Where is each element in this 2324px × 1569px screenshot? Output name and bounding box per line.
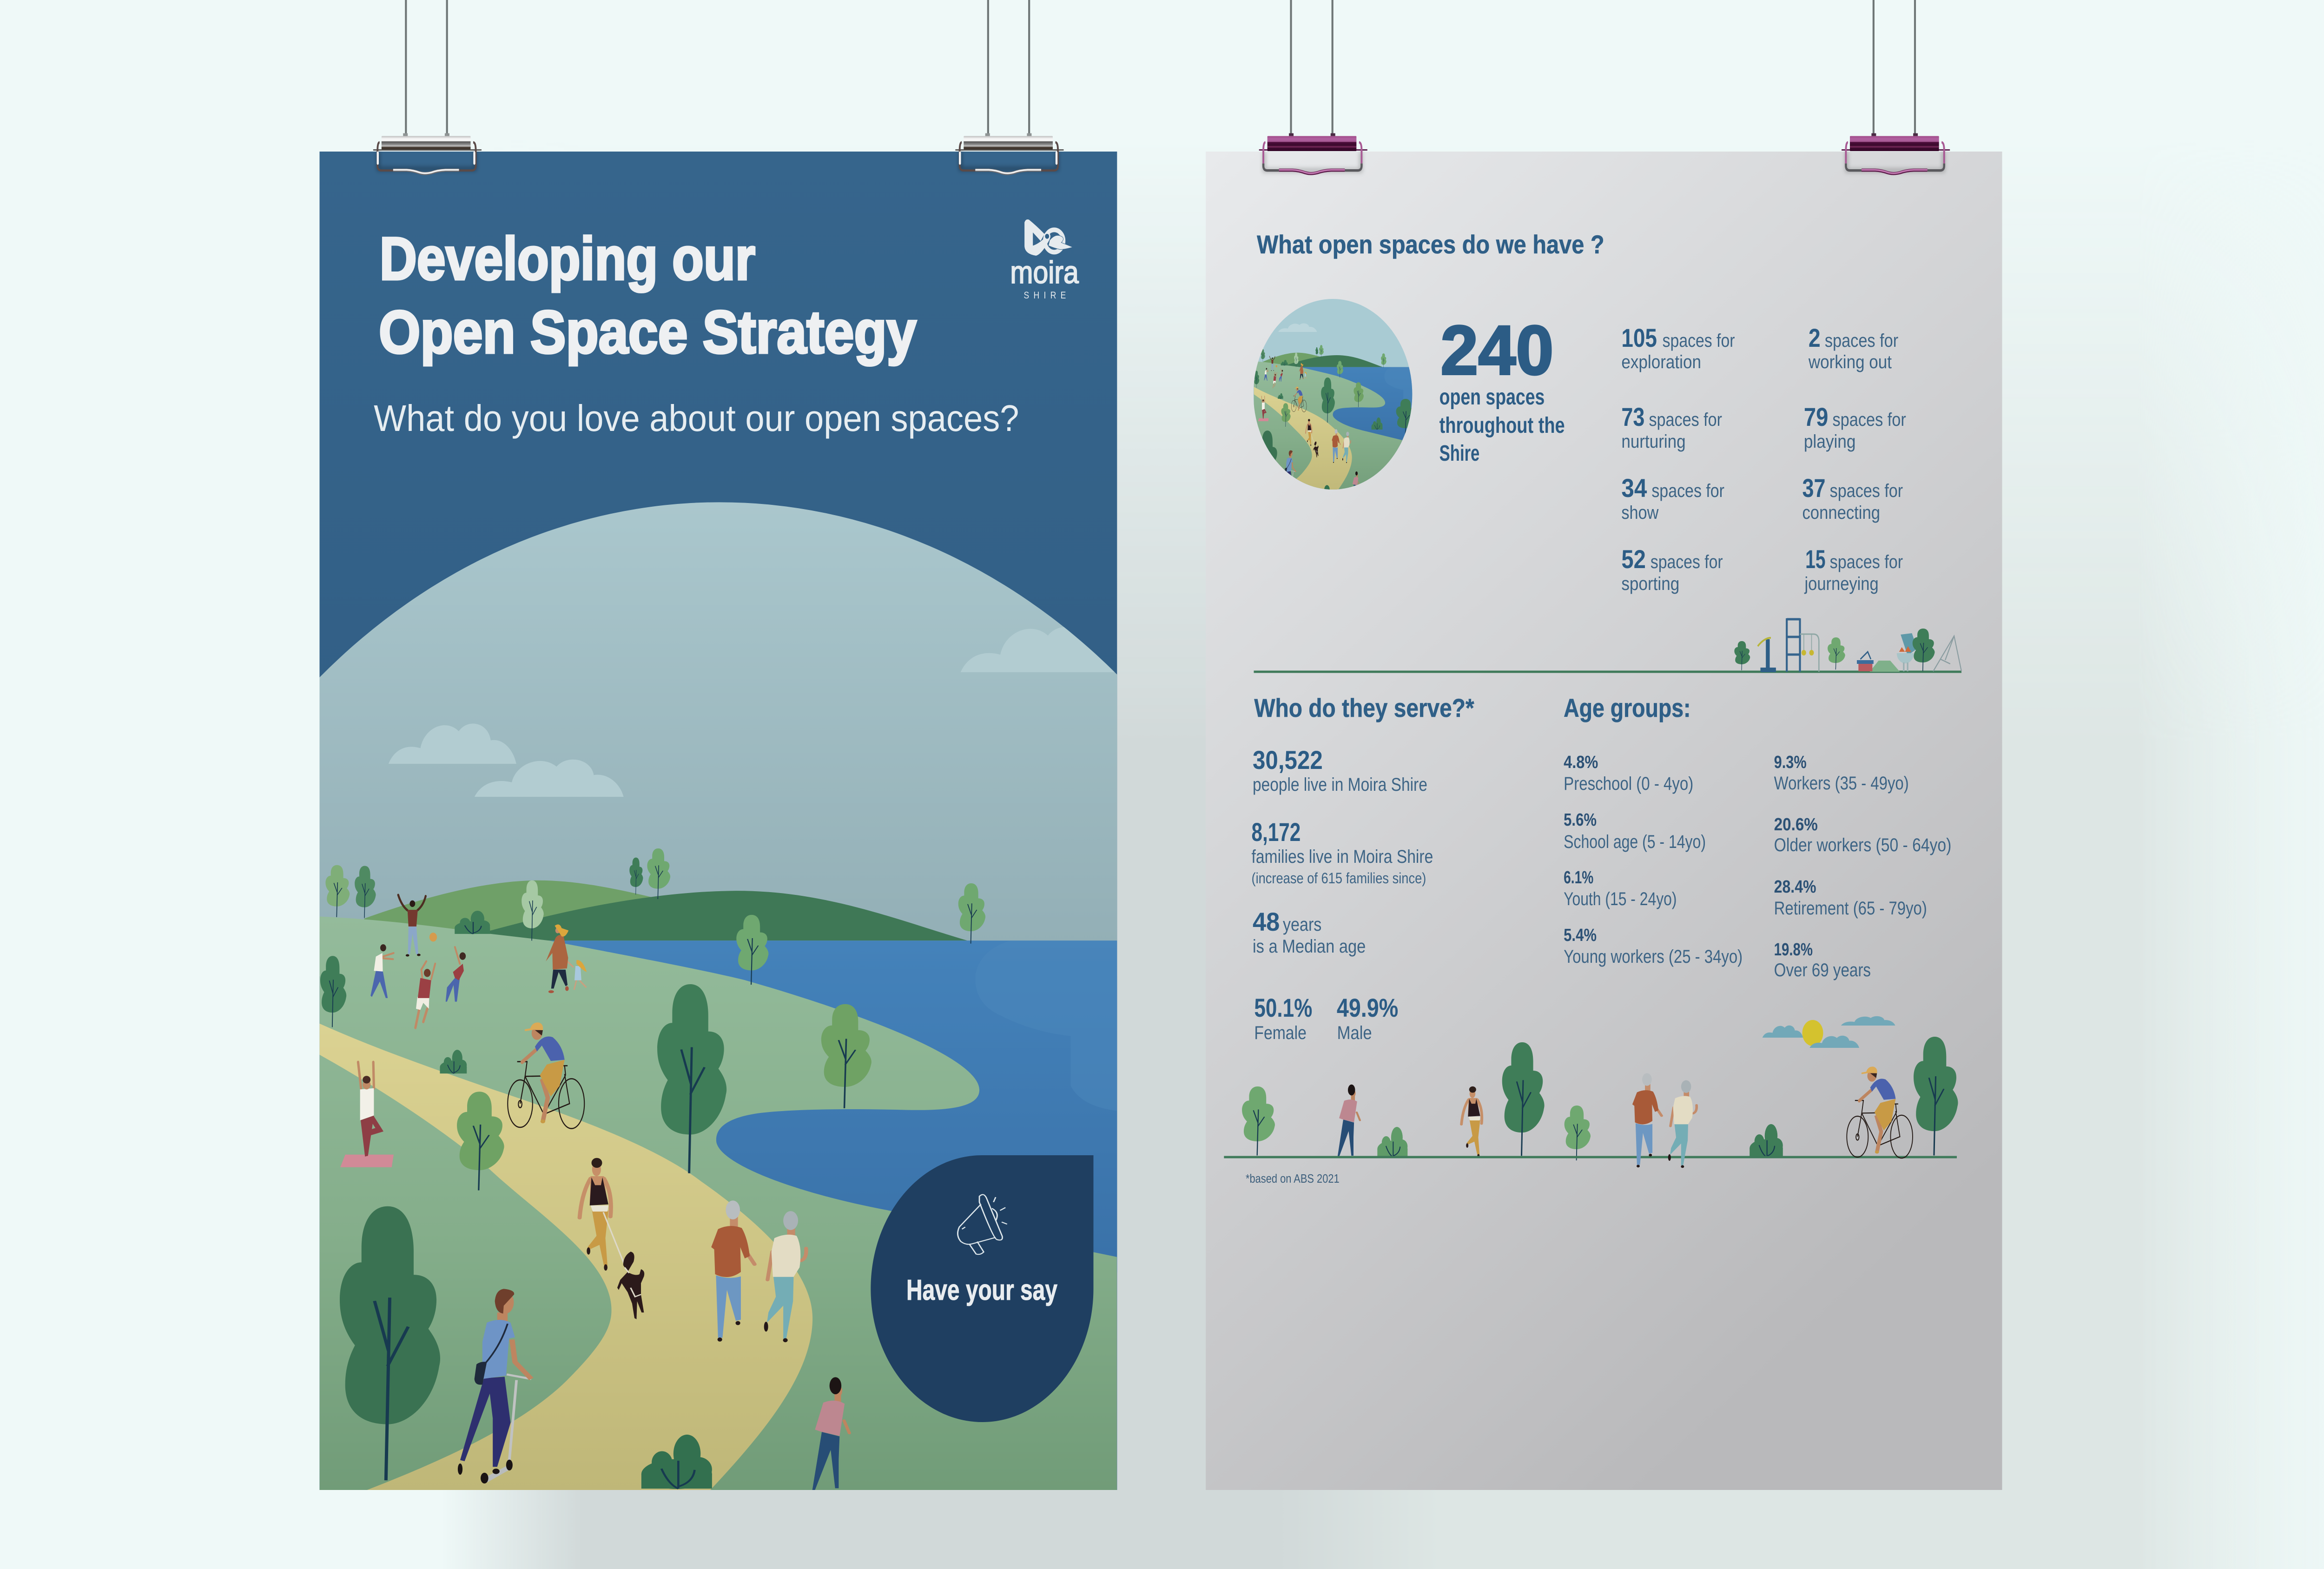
- age: workers: 9.3%: [1774, 752, 1807, 772]
- stat: working out: spaces for: [1825, 330, 1898, 351]
- stat: show: [1621, 473, 1724, 523]
- age: preschool: [1564, 752, 1693, 794]
- ground: [320, 916, 1117, 1491]
- player in maroon: [446, 947, 466, 1002]
- clips: plum: [1259, 133, 1950, 173]
- background wall: [477, 305, 2233, 1569]
- player in red with white shorts: [416, 961, 435, 1028]
- stat: sporting: 52: [1621, 544, 1646, 574]
- illustration: people strip: [1224, 1016, 1958, 1168]
- stat: 240 open spaces: throughout the: [1439, 413, 1565, 438]
- figures: group at play: [340, 895, 587, 1167]
- stat: playing: [1804, 402, 1906, 452]
- stat: show: 34: [1621, 473, 1647, 503]
- stat: exploration: exploration: [1621, 351, 1701, 372]
- fact: female: 50.1%: [1254, 993, 1312, 1022]
- lake: [473, 940, 1125, 1273]
- population facts: [1251, 745, 1433, 1043]
- fact: families: families live in Moira Shire: [1251, 846, 1433, 867]
- logo: moira shire: moira: [1010, 255, 1079, 290]
- callout label: Have your say: [906, 1274, 1057, 1306]
- stat: connecting: [1802, 473, 1903, 523]
- clips: metal: [373, 133, 1064, 173]
- stat: 240 open spaces: [1439, 311, 1565, 466]
- age: retirement: [1774, 877, 1927, 919]
- stat: nurturing: nurturing: [1621, 431, 1686, 452]
- stats: spaces by type: [1621, 323, 1906, 594]
- fact: male: 49.9%: [1337, 993, 1398, 1022]
- player in white: [370, 944, 394, 998]
- age: older workers: Older workers (50 - 64yo): [1774, 834, 1951, 855]
- poster background: [320, 152, 1117, 1490]
- stat: working out: 2: [1809, 323, 1821, 352]
- person walking: [812, 1377, 849, 1490]
- age: youth: Youth (15 - 24yo): [1564, 888, 1677, 909]
- title: [379, 225, 917, 366]
- stat: playing: spaces for: [1833, 409, 1906, 430]
- stat: 240 open spaces: open spaces: [1439, 385, 1545, 410]
- icon: megaphone: [957, 1195, 1007, 1254]
- age: workers: [1774, 752, 1909, 794]
- age: young workers: [1564, 925, 1743, 967]
- yoga woman: [340, 1062, 394, 1167]
- hanging wires: [406, 0, 1915, 135]
- footnote: *based on ABS 2021: [1246, 1172, 1340, 1186]
- stat: 240 open spaces: 240: [1440, 311, 1554, 390]
- trees: [320, 848, 985, 1480]
- clouds: [389, 627, 1119, 797]
- hills: [364, 880, 967, 940]
- walking path: [320, 1024, 812, 1491]
- park landscape illustration: [320, 848, 1125, 1491]
- age: retirement: Retirement (65 - 79yo): [1774, 898, 1927, 919]
- elderly couple: [711, 1200, 806, 1342]
- stat: nurturing: [1621, 402, 1722, 452]
- stat: journeying: journeying: [1804, 573, 1879, 594]
- stat: sporting: [1621, 544, 1723, 594]
- fact: median age: is a Median age: [1253, 936, 1366, 957]
- age: retirement: 28.4%: [1774, 877, 1816, 897]
- stat: working out: working out: [1808, 351, 1892, 372]
- fact: families: [1251, 817, 1433, 887]
- age: over 69: Over 69 years: [1774, 960, 1871, 980]
- stat: show: show: [1621, 502, 1659, 523]
- cyclist: [508, 1022, 584, 1129]
- callout: have your say: [871, 1155, 1093, 1422]
- fact: median age: years: [1283, 914, 1321, 935]
- stat: playing: playing: [1804, 431, 1855, 452]
- age: preschool: 4.8%: [1564, 752, 1598, 772]
- age: workers: Workers (35 - 49yo): [1774, 773, 1909, 794]
- logo: moira shire: SHIRE: [1023, 291, 1066, 301]
- stat: journeying: [1804, 544, 1903, 594]
- illustration: round park scene: [1254, 298, 1416, 499]
- fact: population: [1253, 745, 1427, 795]
- stat: connecting: connecting: [1802, 502, 1880, 523]
- figures: path walkers: [458, 1158, 849, 1490]
- stat: exploration: [1621, 323, 1735, 372]
- heading: age groups: Age groups:: [1564, 693, 1691, 722]
- title: Open Space Strategy: [379, 299, 917, 366]
- fact: population: 30,522: [1253, 745, 1323, 775]
- fact: female: Female: [1254, 1022, 1307, 1043]
- age: older workers: [1774, 814, 1951, 855]
- panel: facts poster: [1206, 152, 2002, 1490]
- fact: families: 8,172: [1251, 817, 1301, 847]
- age: preschool: Preschool (0 - 4yo): [1564, 773, 1693, 794]
- fact: families: (increase of 615 families since): [1251, 870, 1426, 887]
- dog on leash: [603, 1212, 644, 1319]
- panel: strategy poster: [320, 152, 1125, 1491]
- stat: connecting: 37: [1802, 473, 1826, 503]
- fact: male: Male: [1337, 1022, 1372, 1043]
- fact: median age: 48: [1253, 907, 1280, 936]
- age groups list: [1564, 752, 1951, 980]
- fact: population: people live in Moira Shire: [1253, 774, 1427, 795]
- stat: connecting: spaces for: [1830, 480, 1903, 501]
- age: school: School age (5 - 14yo): [1564, 831, 1706, 852]
- ball: [429, 933, 437, 942]
- age: young workers: Young workers (25 - 34yo): [1564, 946, 1743, 967]
- parent and child: [546, 924, 587, 993]
- stat: journeying: 15: [1805, 544, 1826, 574]
- stat: exploration: spaces for: [1663, 330, 1735, 351]
- stat: 240 open spaces: Shire: [1439, 441, 1479, 466]
- stat: playing: 79: [1804, 402, 1828, 431]
- stat: working out: [1808, 323, 1898, 372]
- logo: moira shire: [1010, 219, 1079, 301]
- age: older workers: 20.6%: [1774, 814, 1818, 834]
- illustration: playground strip: [1254, 618, 1961, 672]
- subtitle: What do you love about our open spaces?: [374, 397, 1019, 439]
- age: young workers: 5.4%: [1564, 925, 1597, 945]
- sun and clouds: [1763, 1016, 1895, 1048]
- scooter rider: [458, 1289, 531, 1483]
- stat: show: spaces for: [1651, 480, 1724, 501]
- stat: nurturing: spaces for: [1649, 409, 1722, 430]
- sky dome: [320, 502, 1117, 976]
- fact: female: [1254, 993, 1312, 1043]
- age: youth: 6.1%: [1564, 867, 1593, 887]
- stat: sporting: sporting: [1621, 573, 1679, 594]
- bushes: [440, 911, 712, 1489]
- man with raised arms: [398, 895, 426, 957]
- stat: exploration: 105: [1621, 323, 1657, 352]
- fact: male: [1337, 993, 1398, 1043]
- age: school: [1564, 810, 1706, 852]
- runner: [580, 1158, 611, 1271]
- age: over 69: 19.8%: [1774, 940, 1813, 960]
- fact: median age: [1253, 907, 1366, 957]
- heading: who do they serve: Who do they serve?*: [1254, 693, 1474, 722]
- heading: what open spaces: What open spaces do we have ?: [1257, 230, 1604, 259]
- age: school: 5.6%: [1564, 810, 1597, 830]
- stat: nurturing: 73: [1621, 402, 1644, 431]
- stat: journeying: spaces for: [1830, 551, 1903, 572]
- title: Developing our: [380, 225, 755, 292]
- age: youth: [1564, 867, 1677, 909]
- age: over 69: [1774, 940, 1871, 980]
- stat: sporting: spaces for: [1651, 551, 1723, 572]
- poster background: [1206, 152, 2002, 1490]
